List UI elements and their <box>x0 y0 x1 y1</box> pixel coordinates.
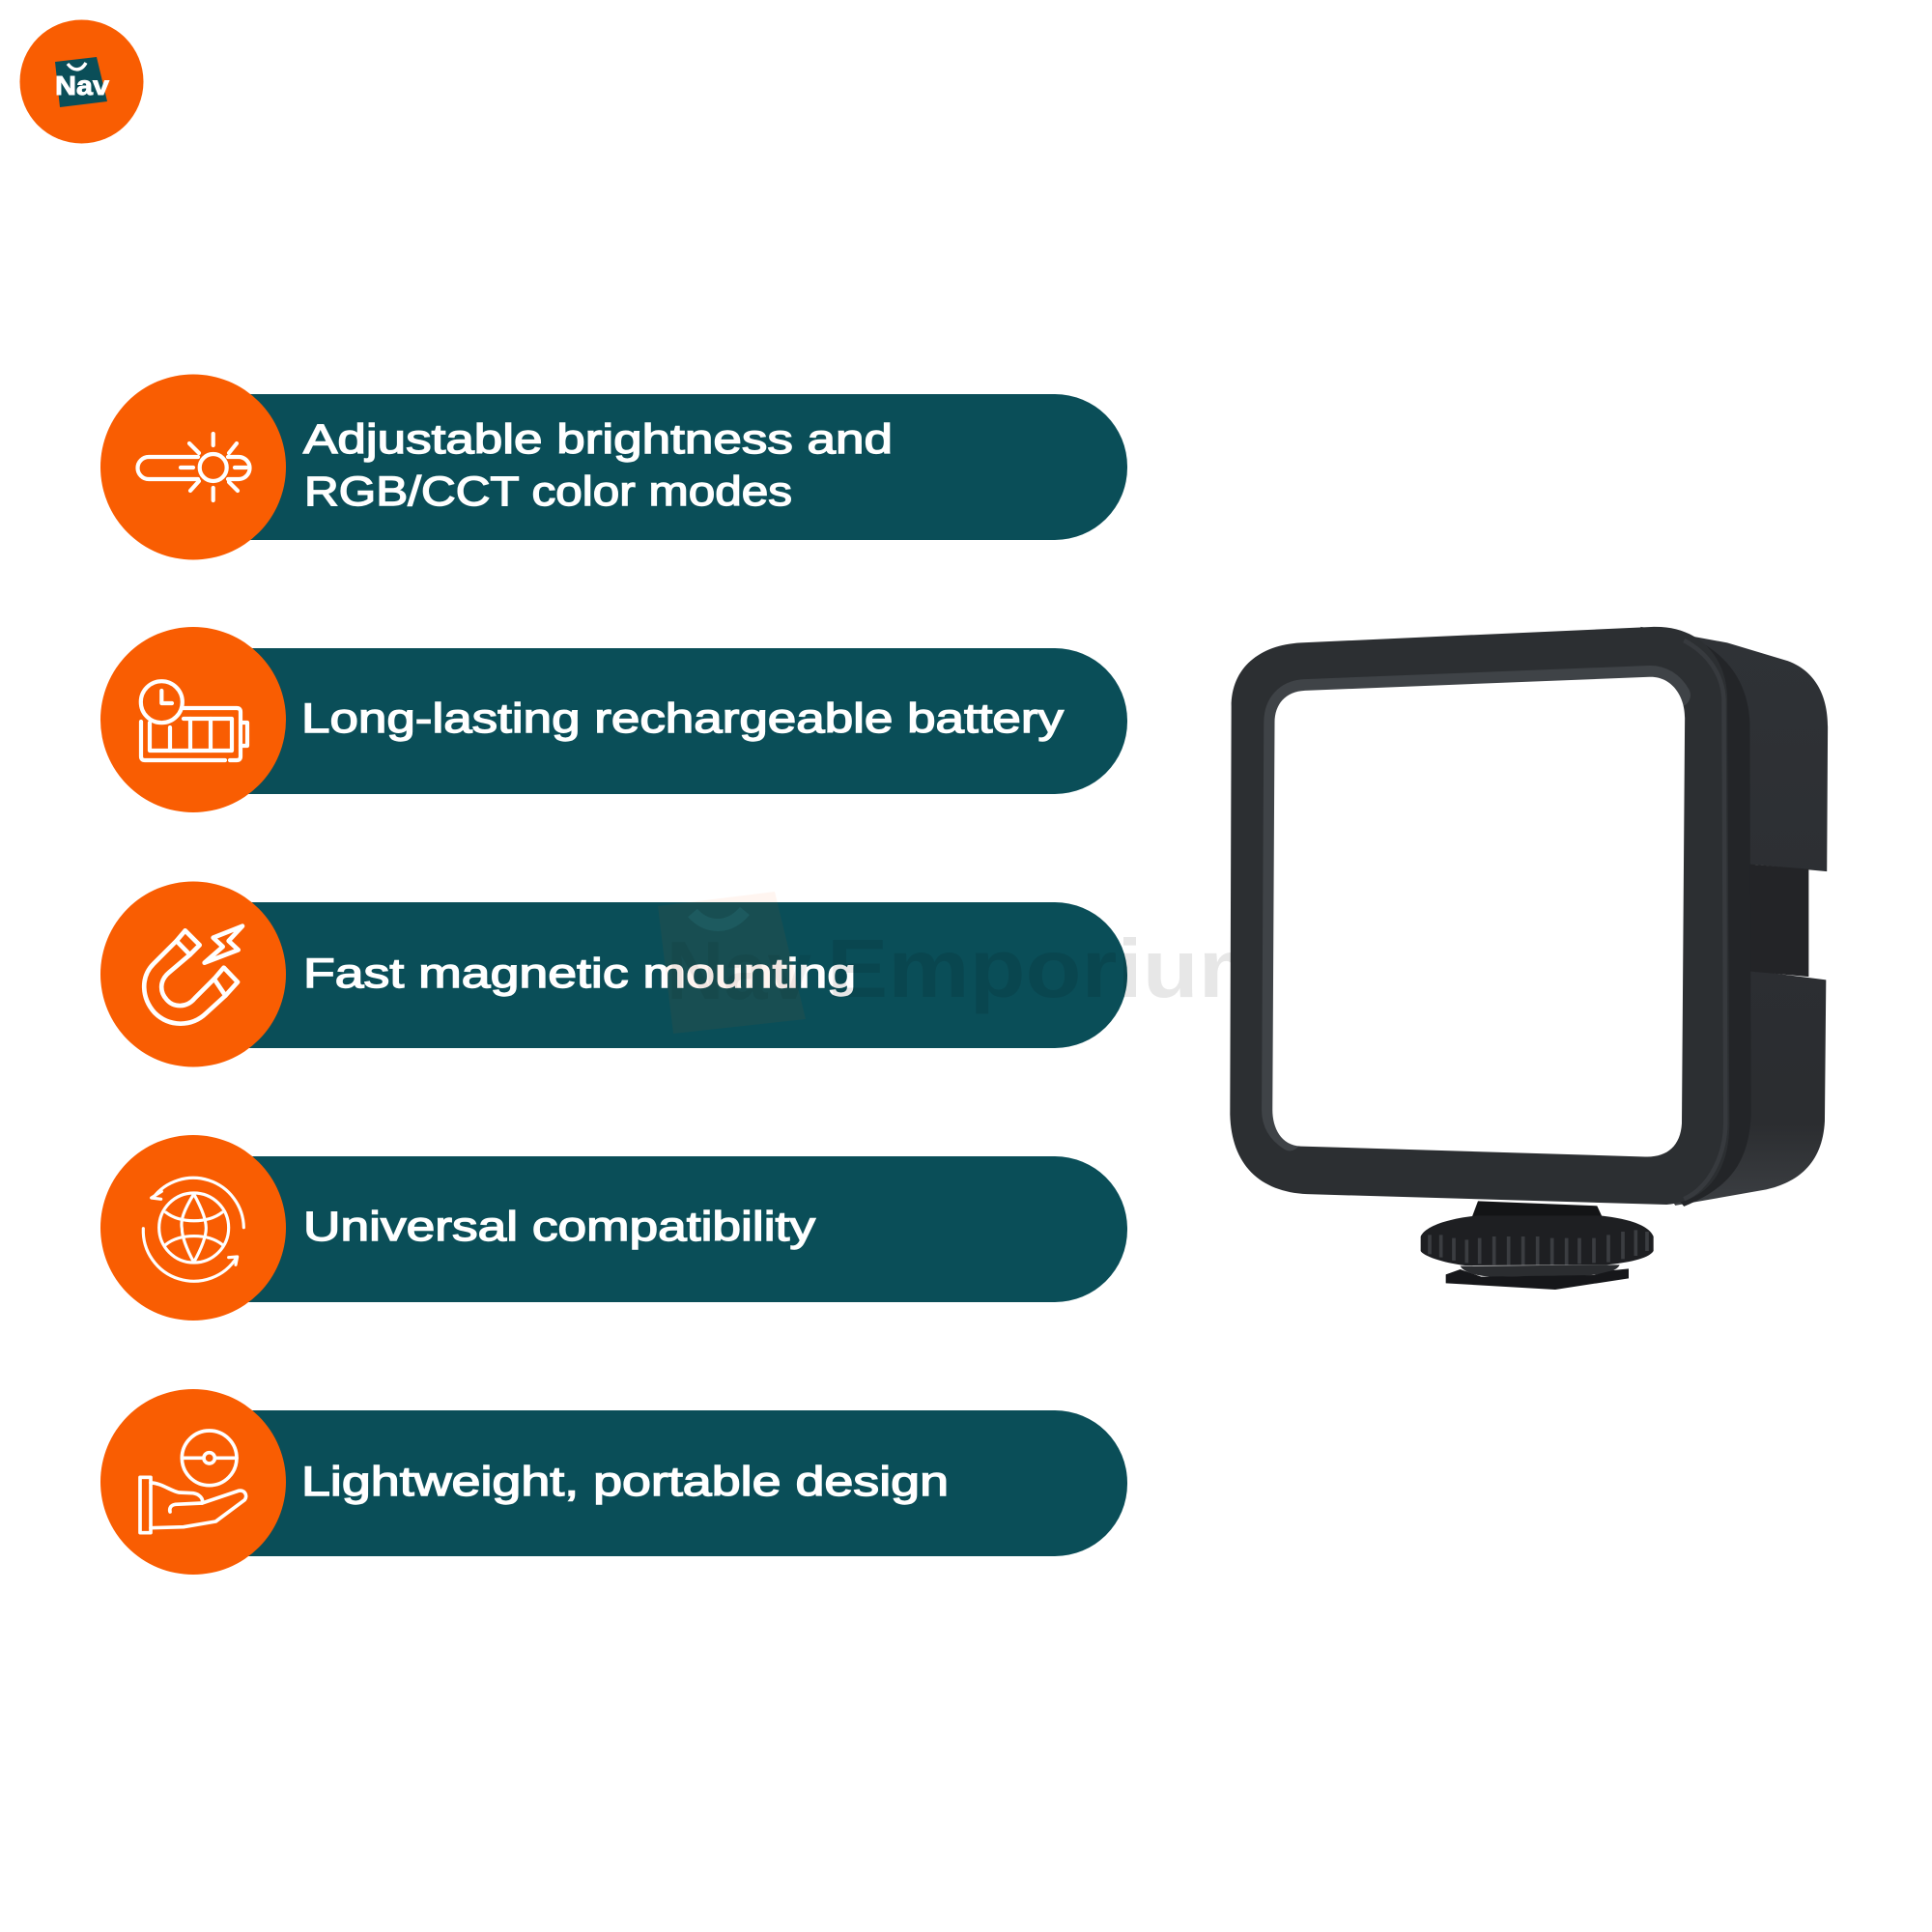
knurled wheel <box>1421 1215 1654 1265</box>
icon circle <box>100 881 286 1066</box>
frame right highlight <box>1684 640 1725 1199</box>
faint watermark: Nav <box>667 925 811 1017</box>
icon: battery with clock <box>141 681 247 760</box>
bar <box>145 1410 1127 1556</box>
feature text: Long-lasting rechargeable battery <box>301 696 1065 742</box>
dark band behind frame <box>1640 627 1751 1207</box>
front frame <box>1230 627 1729 1205</box>
brand logo badge: Nav <box>55 71 109 100</box>
icon circle <box>100 1135 286 1321</box>
feature text: Universal compatibility <box>303 1204 816 1250</box>
feature row: magnetic mounting <box>100 881 1127 1066</box>
feature text: Lightweight, portable design <box>301 1459 949 1505</box>
bar <box>145 394 1127 540</box>
side notch <box>1745 864 1808 977</box>
hot shoe mount <box>1421 1201 1654 1290</box>
icon: magnet and bolt <box>144 926 242 1024</box>
bar <box>145 1156 1127 1302</box>
faint watermark: Emporium <box>827 923 1280 1015</box>
icon: hand holding disc <box>140 1431 246 1533</box>
feature row: brightness <box>100 375 1127 560</box>
icon: brightness slider <box>137 434 249 500</box>
light panel <box>1272 677 1685 1157</box>
icon circle <box>100 1389 286 1575</box>
icon circle <box>100 375 286 560</box>
feature row: battery <box>100 627 1127 812</box>
feature row: lightweight design <box>100 1389 1127 1575</box>
frame inner bevel <box>1272 677 1680 1140</box>
feature text: Adjustable brightness and <box>303 416 893 463</box>
product: LED video light <box>1230 627 1828 1207</box>
feature row: universal compatibility <box>100 1135 1127 1321</box>
bar <box>145 648 1127 794</box>
feature text: RGB/CCT color modes <box>304 469 792 515</box>
feature text: Fast magnetic mounting <box>303 951 856 997</box>
brand logo badge <box>19 19 143 143</box>
icon: globe with arrows <box>143 1178 243 1281</box>
feature text <box>303 416 893 515</box>
base plate <box>1446 1268 1629 1290</box>
wheel knurling <box>1430 1230 1647 1264</box>
bar <box>145 902 1127 1048</box>
faint watermark <box>658 892 1280 1034</box>
light body side <box>1640 627 1828 1206</box>
locking ring <box>1461 1264 1620 1277</box>
icon circle <box>100 627 286 812</box>
neck <box>1468 1201 1606 1227</box>
